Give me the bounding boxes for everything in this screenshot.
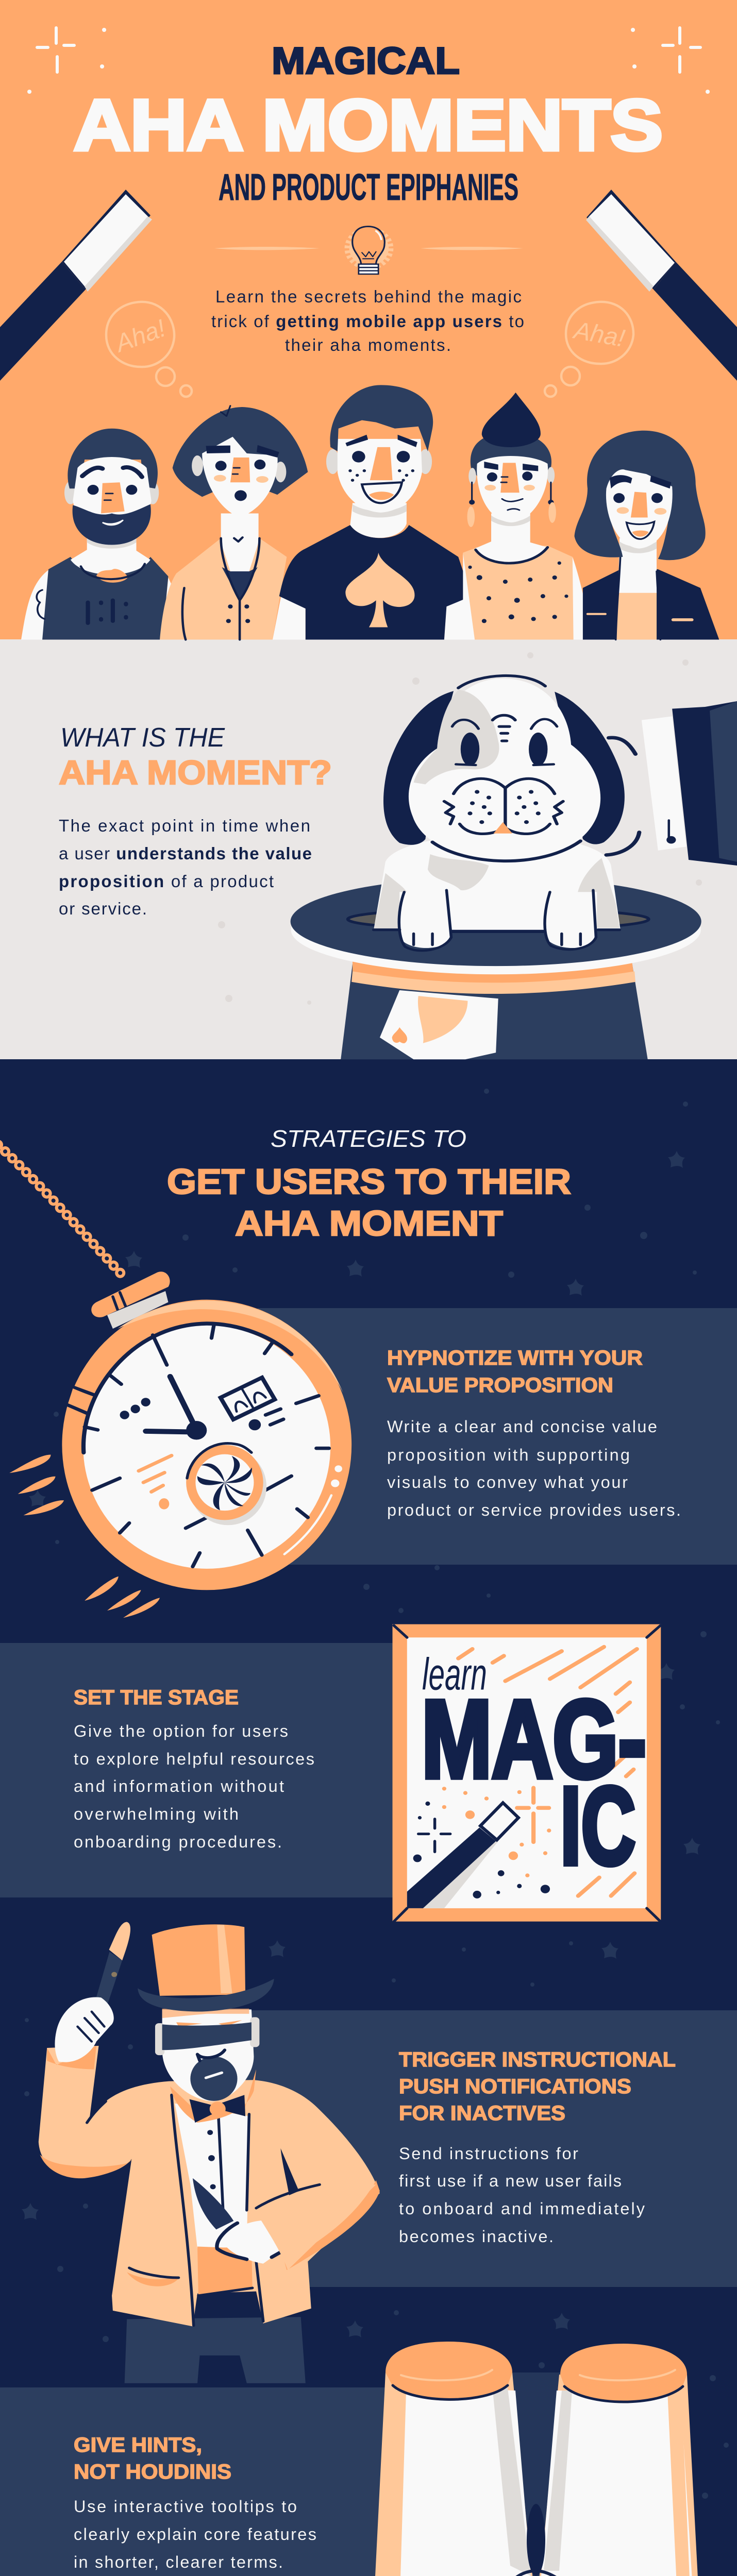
night sky dots bbox=[21, 1089, 729, 2576]
icon: right magic wand bbox=[586, 190, 737, 381]
icon: left magic wand bbox=[0, 190, 152, 381]
body: push notifications: becomes inactive. bbox=[399, 2227, 554, 2246]
audience of five characters bbox=[21, 385, 719, 640]
section background: strategies bbox=[0, 1059, 737, 2576]
thought bubble left: Aha! bbox=[111, 315, 169, 358]
text block: hypnotize bbox=[387, 1347, 681, 1519]
title: AHA MOMENTS bbox=[74, 84, 663, 165]
divider: bulb rules bbox=[214, 247, 523, 250]
magician jacket bbox=[39, 2046, 380, 2327]
heading: what is the aha moment: WHAT IS THE bbox=[60, 723, 225, 753]
heading: push notifications: TRIGGER INSTRUCTIONAL bbox=[399, 2048, 676, 2071]
intro text: Learn the secrets behind the magic bbox=[215, 287, 522, 306]
illustration: magician bbox=[39, 1922, 380, 2383]
section background: header bbox=[0, 0, 737, 639]
section background: what is the aha moment bbox=[0, 639, 737, 1060]
body: set the stage: overwhelming with bbox=[74, 1805, 239, 1823]
text block: push notifications bbox=[399, 2048, 676, 2246]
body: push notifications: Send instructions for bbox=[399, 2144, 578, 2163]
panel: hypnotize bbox=[258, 1308, 737, 1565]
heading: hypnotize: VALUE PROPOSITION bbox=[387, 1374, 613, 1397]
character: bearded man bbox=[21, 429, 173, 640]
body: push notifications bbox=[399, 2144, 645, 2246]
magician shirt and tie bbox=[87, 2069, 263, 2326]
body: set the stage: to explore helpful resources bbox=[74, 1750, 314, 1768]
panel: set the stage bbox=[0, 1643, 407, 1897]
icon: pocket watch bbox=[9, 1272, 351, 1618]
body: hypnotize: proposition with supporting bbox=[387, 1446, 630, 1464]
icon: pocket watch chain bbox=[0, 1145, 124, 1277]
body: set the stage bbox=[74, 1722, 314, 1851]
icon: magician hand bbox=[642, 701, 737, 866]
text block: definition: or service. bbox=[59, 899, 147, 918]
heading: push notifications bbox=[399, 2048, 676, 2125]
text block: definition: proposition of a product bbox=[59, 872, 274, 891]
title: MAGICAL bbox=[272, 40, 460, 82]
title: AND PRODUCT EPIPHANIES bbox=[219, 167, 518, 208]
body: hypnotize: product or service provides users. bbox=[387, 1501, 681, 1519]
magician wand and raised hand bbox=[94, 1922, 130, 2009]
text block: definition: a user understands the value bbox=[59, 844, 312, 863]
text block: definition bbox=[59, 816, 312, 918]
magician pants bbox=[125, 2317, 306, 2383]
intro text: their aha moments. bbox=[285, 335, 451, 354]
character: man in spade tee bbox=[273, 385, 475, 640]
text block: hints bbox=[74, 2434, 316, 2571]
light section dots bbox=[218, 652, 702, 1005]
character: woman with quiff bbox=[463, 393, 592, 640]
illustration: dog in magician hat bbox=[291, 675, 737, 1059]
night sky sparkles bbox=[8, 1099, 722, 2576]
thought bubble right bbox=[545, 302, 633, 397]
icon: learn magic poster: IC bbox=[560, 1764, 635, 1887]
body: set the stage: onboarding procedures. bbox=[74, 1833, 282, 1851]
magician hands and card bbox=[55, 1997, 376, 2270]
text block: set the stage bbox=[74, 1686, 314, 1851]
text block: definition: The exact point in time when bbox=[59, 816, 310, 835]
title bbox=[74, 40, 663, 208]
icon: dog bbox=[374, 675, 639, 951]
thought bubble left bbox=[106, 302, 192, 397]
heading: strategies: GET USERS TO THEIR bbox=[167, 1162, 571, 1201]
heading: strategies: STRATEGIES TO bbox=[271, 1125, 466, 1152]
heading: what is the aha moment bbox=[59, 723, 332, 791]
icon: learn magic poster: MAG- bbox=[422, 1677, 646, 1801]
body: hypnotize bbox=[387, 1417, 681, 1519]
body: set the stage: Give the option for users bbox=[74, 1722, 288, 1740]
heading: hypnotize: HYPNOTIZE WITH YOUR bbox=[387, 1347, 643, 1369]
body: set the stage: and information without bbox=[74, 1777, 284, 1795]
intro text bbox=[211, 287, 524, 354]
body: hints: clearly explain core features bbox=[74, 2525, 316, 2544]
character: woman with bob bbox=[160, 406, 308, 640]
heading: push notifications: PUSH NOTIFICATIONS bbox=[399, 2075, 631, 2098]
body: push notifications: to onboard and immediately bbox=[399, 2199, 645, 2218]
body: hints bbox=[74, 2497, 316, 2571]
intro text: trick of getting mobile app users to bbox=[211, 312, 524, 331]
magician head and hat bbox=[138, 1924, 274, 2102]
character: woman with long hair bbox=[574, 431, 719, 640]
heading: set the stage: SET THE STAGE bbox=[74, 1686, 239, 1709]
body: hypnotize: Write a clear and concise value bbox=[387, 1417, 657, 1436]
body: hints: Use interactive tooltips to bbox=[74, 2497, 297, 2516]
heading: what is the aha moment: AHA MOMENT? bbox=[59, 753, 332, 791]
body: push notifications: first use if a new user fails bbox=[399, 2172, 622, 2190]
light section sparkles bbox=[231, 686, 712, 1027]
icon: learn magic poster bbox=[393, 1624, 661, 1922]
heading: hints: NOT HOUDINIS bbox=[74, 2461, 231, 2483]
heading: strategies: AHA MOMENT bbox=[235, 1204, 503, 1243]
night sky stars bbox=[22, 1151, 710, 2576]
icon: learn magic poster: learn bbox=[422, 1649, 487, 1699]
icon: light bulb bbox=[349, 227, 389, 274]
heading: strategies bbox=[167, 1125, 571, 1243]
heading: hints bbox=[74, 2434, 231, 2483]
body: hypnotize: visuals to convey what your bbox=[387, 1473, 628, 1492]
panel: hints bbox=[0, 2387, 397, 2576]
header sparkles bbox=[29, 28, 708, 92]
heading: push notifications: FOR INACTIVES bbox=[399, 2102, 565, 2125]
body: hints: in shorter, clearer terms. bbox=[74, 2553, 283, 2571]
icon: top hat bbox=[291, 877, 701, 1059]
heading: hints: GIVE HINTS, bbox=[74, 2434, 202, 2456]
panel: push notifications bbox=[232, 2010, 737, 2287]
icon: binoculars bbox=[374, 2342, 699, 2576]
heading: hypnotize bbox=[387, 1347, 643, 1397]
thought bubble right: Aha! bbox=[571, 316, 627, 352]
